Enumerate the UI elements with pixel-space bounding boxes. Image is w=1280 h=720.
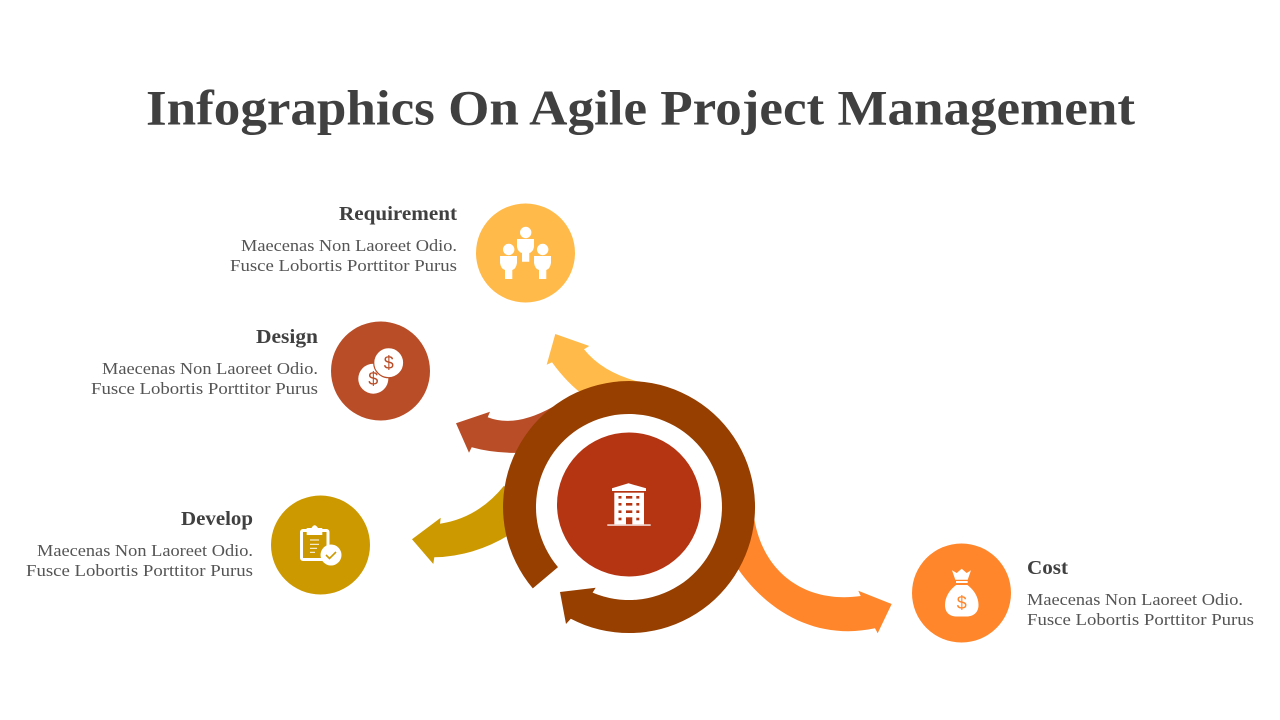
panel: cost [912,544,1254,642]
panel: develop [26,496,370,594]
arrow: design [456,407,580,453]
icon: coins [331,322,430,420]
heading: cost: Cost [1027,557,1068,579]
text: cost description: Fusce Lobortis Porttitor Purus [1027,610,1254,629]
text: design description: Maecenas Non Laoreet Odio. [102,359,318,378]
text: cost description [1027,590,1254,629]
text: requirement description [230,236,457,275]
arrow: requirement [547,334,640,420]
icon: clipboard [271,496,370,594]
icon: building [607,483,651,526]
icon: coins: $ [384,353,394,373]
ring backing disc [519,397,739,617]
text: design description [91,359,318,398]
heading: develop: Develop [181,508,253,530]
text: develop description [26,541,253,580]
icon: people [476,204,575,302]
title: Infographics On Agile Project Management [146,80,1135,136]
panel: design [91,322,430,420]
ring arrow [503,381,755,633]
arrow: develop [412,486,530,564]
icon: money bag [912,544,1011,642]
text: develop description: Maecenas Non Laoreet Odio. [37,541,253,560]
icon: money bag: $ [957,593,967,613]
text: requirement description: Fusce Lobortis Porttitor Purus [230,256,457,275]
text: develop description: Fusce Lobortis Porttitor Purus [26,561,253,580]
arrow: cost [720,517,892,633]
text: requirement description: Maecenas Non Laoreet Odio. [241,236,457,255]
heading: requirement: Requirement [339,203,457,225]
text: design description: Fusce Lobortis Porttitor Purus [91,379,318,398]
text: cost description: Maecenas Non Laoreet Odio. [1027,590,1243,609]
heading: design: Design [256,326,318,348]
centre circle with building icon [557,432,701,576]
panel: requirement [230,203,575,302]
icon: coins: $ [368,369,378,389]
